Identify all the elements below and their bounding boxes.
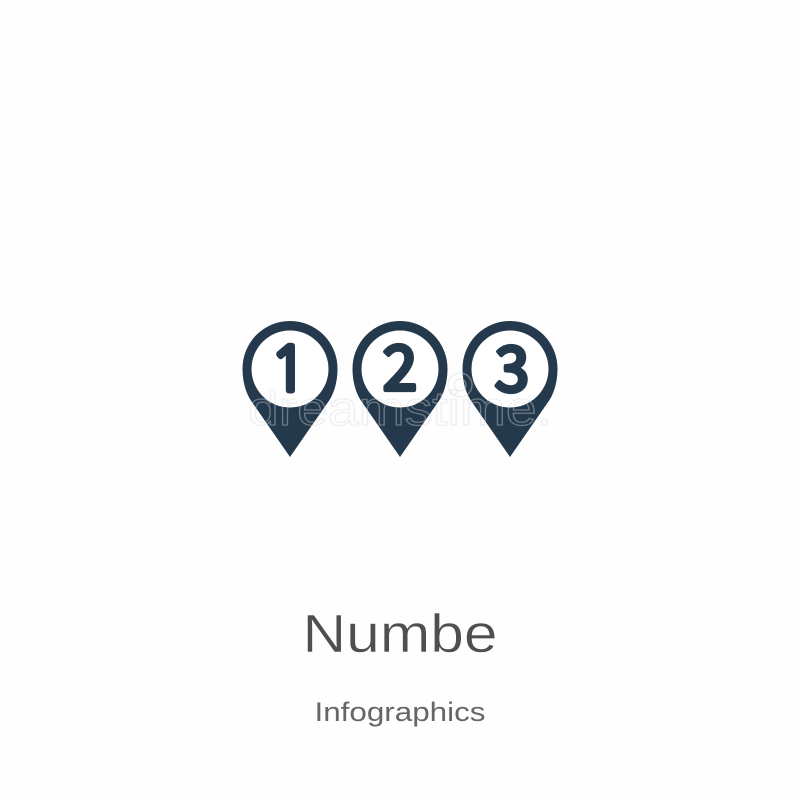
icon: map pin 2 <box>352 318 448 457</box>
icon: map pin 2: 2 <box>383 318 417 408</box>
icon: map pin 3 <box>462 319 558 457</box>
watermark: dreamstime. <box>248 383 552 436</box>
icon: map pin 1 <box>242 321 338 457</box>
title: Numbe <box>302 604 498 664</box>
icon: map pin 1: 1 <box>270 339 307 400</box>
icon: three numbered map pins <box>242 318 558 457</box>
icon: map pin 3: 3 <box>495 319 529 409</box>
subtitle: Infographics <box>314 697 486 727</box>
